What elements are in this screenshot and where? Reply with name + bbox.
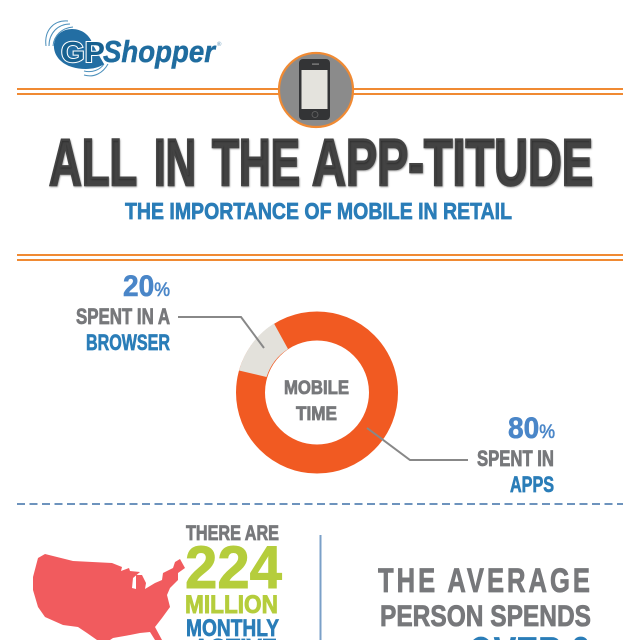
map: United States (33, 554, 185, 640)
logo Shopper wordmark: Shopper (103, 34, 217, 69)
logo GP letters: GP (61, 37, 105, 69)
icon: smartphone in circle (279, 53, 353, 127)
apps percentage: 80% (508, 412, 555, 445)
donut chart: mobile time (239, 324, 384, 459)
heading line 2: PERSON SPENDS (380, 600, 591, 633)
subtitle: THE IMPORTANCE OF MOBILE IN RETAIL (125, 198, 512, 224)
browser leader line (178, 317, 264, 348)
browser percentage: 20% (123, 270, 170, 303)
phone home button (312, 112, 318, 118)
donut segment: browser 20% (239, 324, 288, 377)
stat unit: MILLION (185, 591, 278, 619)
icon circle (279, 53, 353, 127)
stat number: 224 (185, 534, 283, 601)
stat: 224 million monthly active (185, 522, 283, 640)
callout: 80% in apps (367, 412, 555, 497)
stat: average person spends (378, 562, 593, 640)
title: THE (212, 125, 300, 199)
apps label line 2: APPS (510, 472, 554, 497)
logo blue globe (54, 29, 104, 69)
donut centre label: MOBILE (284, 378, 349, 399)
logo registered mark: ® (217, 41, 222, 48)
title (49, 125, 593, 199)
donut centre label: TIME (296, 404, 337, 425)
callout: 20% in a browser (76, 270, 264, 355)
logo: GPShopper (46, 21, 222, 76)
browser label line 1: SPENT IN A (76, 304, 170, 329)
phone screen (302, 70, 328, 109)
title: ALL (49, 125, 137, 199)
browser label line 2: BROWSER (86, 330, 170, 355)
logo signal arcs (46, 21, 108, 76)
apps label line 1: SPENT IN (477, 446, 554, 471)
title: IN (154, 125, 196, 199)
donut centre label (284, 378, 349, 425)
phone body (299, 59, 330, 120)
stat intro: THERE ARE (186, 522, 279, 545)
apps leader line (367, 428, 468, 460)
phone speaker (312, 64, 319, 65)
donut segment: apps 80% (250, 326, 384, 459)
second orange double rule (17, 254, 623, 261)
top orange double rule (17, 88, 623, 95)
